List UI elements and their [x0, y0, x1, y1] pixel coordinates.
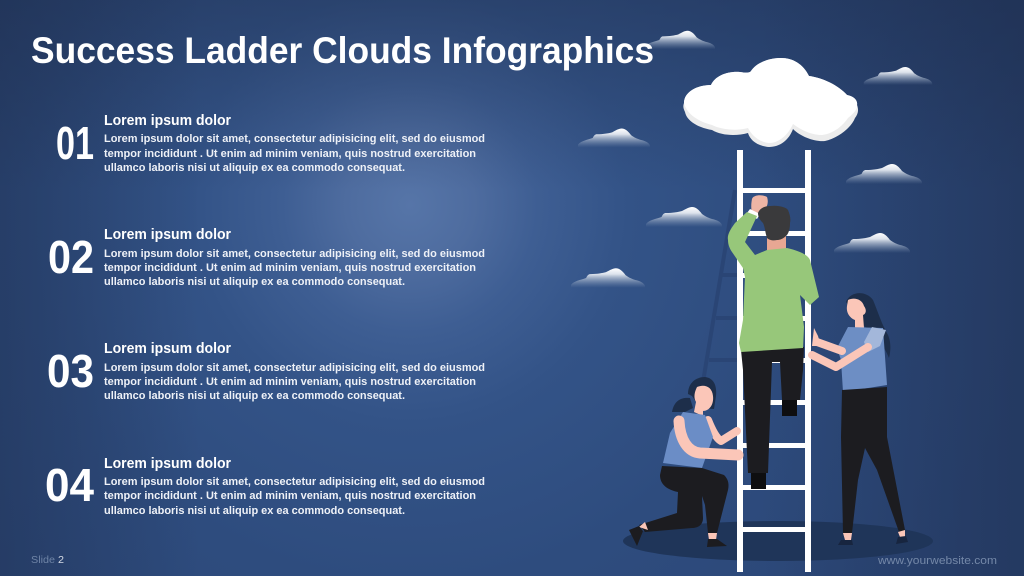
- number 03: 03: [47, 345, 94, 397]
- number 01: 01: [56, 117, 94, 169]
- heading 01: Lorem ipsum dolor: [104, 113, 231, 129]
- small cloud 4: [846, 164, 922, 184]
- person: woman standing: [812, 293, 908, 545]
- list item 01: [56, 113, 485, 174]
- number 04: 04: [45, 459, 94, 511]
- main cloud: [683, 58, 858, 147]
- number 02: 02: [48, 231, 94, 283]
- small background clouds: [571, 31, 932, 288]
- list item 04: [45, 456, 485, 517]
- body text 04: Lorem ipsum dolor sit amet, consectetur adipisicing elit, sed do eiusmod: [104, 476, 485, 488]
- hand: [812, 328, 821, 346]
- ladder: [737, 150, 811, 572]
- body text 03: [104, 362, 485, 402]
- ground shadow: [623, 521, 933, 561]
- body text 04: [104, 476, 485, 517]
- body text 02: [104, 248, 485, 288]
- body text 02: ullamco laboris nisi ut aliquip ex ea commodo consequat.: [104, 276, 405, 288]
- shirt: [837, 327, 887, 392]
- body text 02: tempor incididunt . Ut enim ad minim veniam, quis nostrud exercitation: [104, 262, 476, 274]
- shirt: [663, 412, 713, 468]
- body text 04: tempor incididunt . Ut enim ad minim veniam, quis nostrud exercitation: [104, 490, 476, 502]
- small cloud 7: [571, 268, 645, 288]
- pants: [639, 466, 729, 533]
- person: man climbing: [728, 195, 819, 489]
- shoes: [629, 526, 727, 547]
- cloud highlight layer: [684, 58, 857, 143]
- shoes: [838, 536, 908, 545]
- footer: website: www.yourwebsite.com: [877, 555, 997, 567]
- heading 03: Lorem ipsum dolor: [104, 341, 231, 357]
- heading 02: Lorem ipsum dolor: [104, 227, 231, 243]
- body text 03: Lorem ipsum dolor sit amet, consectetur adipisicing elit, sed do eiusmod: [104, 362, 485, 374]
- body text 01: Lorem ipsum dolor sit amet, consectetur adipisicing elit, sed do eiusmod: [104, 133, 485, 145]
- face and neck: [694, 386, 713, 416]
- small cloud 3: [578, 129, 650, 147]
- list item 02: [48, 227, 485, 288]
- small cloud 5: [646, 207, 722, 227]
- shoes: [751, 400, 797, 489]
- body text 01: tempor incididunt . Ut enim ad minim veniam, quis nostrud exercitation: [104, 148, 476, 160]
- body text 03: tempor incididunt . Ut enim ad minim veniam, quis nostrud exercitation: [104, 376, 476, 388]
- body text 03: ullamco laboris nisi ut aliquip ex ea commodo consequat.: [104, 390, 405, 402]
- shirt: [728, 212, 819, 352]
- body text 01: ullamco laboris nisi ut aliquip ex ea commodo consequat.: [104, 162, 405, 174]
- neck: [767, 236, 786, 251]
- small cloud 2: [864, 67, 932, 85]
- arms: [812, 342, 868, 367]
- cloud shadow layer: [683, 58, 858, 147]
- body text 01: [104, 133, 485, 174]
- heading 04: Lorem ipsum dolor: [104, 456, 231, 472]
- hair: [758, 206, 790, 240]
- hair: [846, 293, 890, 358]
- face and neck: [847, 299, 866, 328]
- hand: [751, 195, 768, 214]
- list item 03: [47, 341, 485, 402]
- ladder shadow: [700, 190, 738, 400]
- foot skin: [843, 530, 905, 540]
- body text 02: Lorem ipsum dolor sit amet, consectetur adipisicing elit, sed do eiusmod: [104, 248, 485, 260]
- ponytail: [672, 398, 693, 412]
- pants: [841, 387, 905, 533]
- foot skin: [639, 522, 717, 540]
- pants: [741, 347, 804, 473]
- hair: [688, 377, 716, 409]
- body text 04: ullamco laboris nisi ut aliquip ex ea commodo consequat.: [104, 505, 405, 517]
- footer: slide number: Slide 2: [31, 554, 64, 566]
- near arm: [679, 421, 738, 455]
- small cloud 1: [645, 31, 715, 49]
- sleeve: [864, 327, 886, 352]
- person: woman kneeling: [629, 377, 738, 547]
- small cloud 6: [834, 233, 910, 253]
- cuff: [747, 209, 760, 219]
- title: Success Ladder Clouds Infographics: [31, 30, 654, 71]
- far arm: [708, 420, 737, 441]
